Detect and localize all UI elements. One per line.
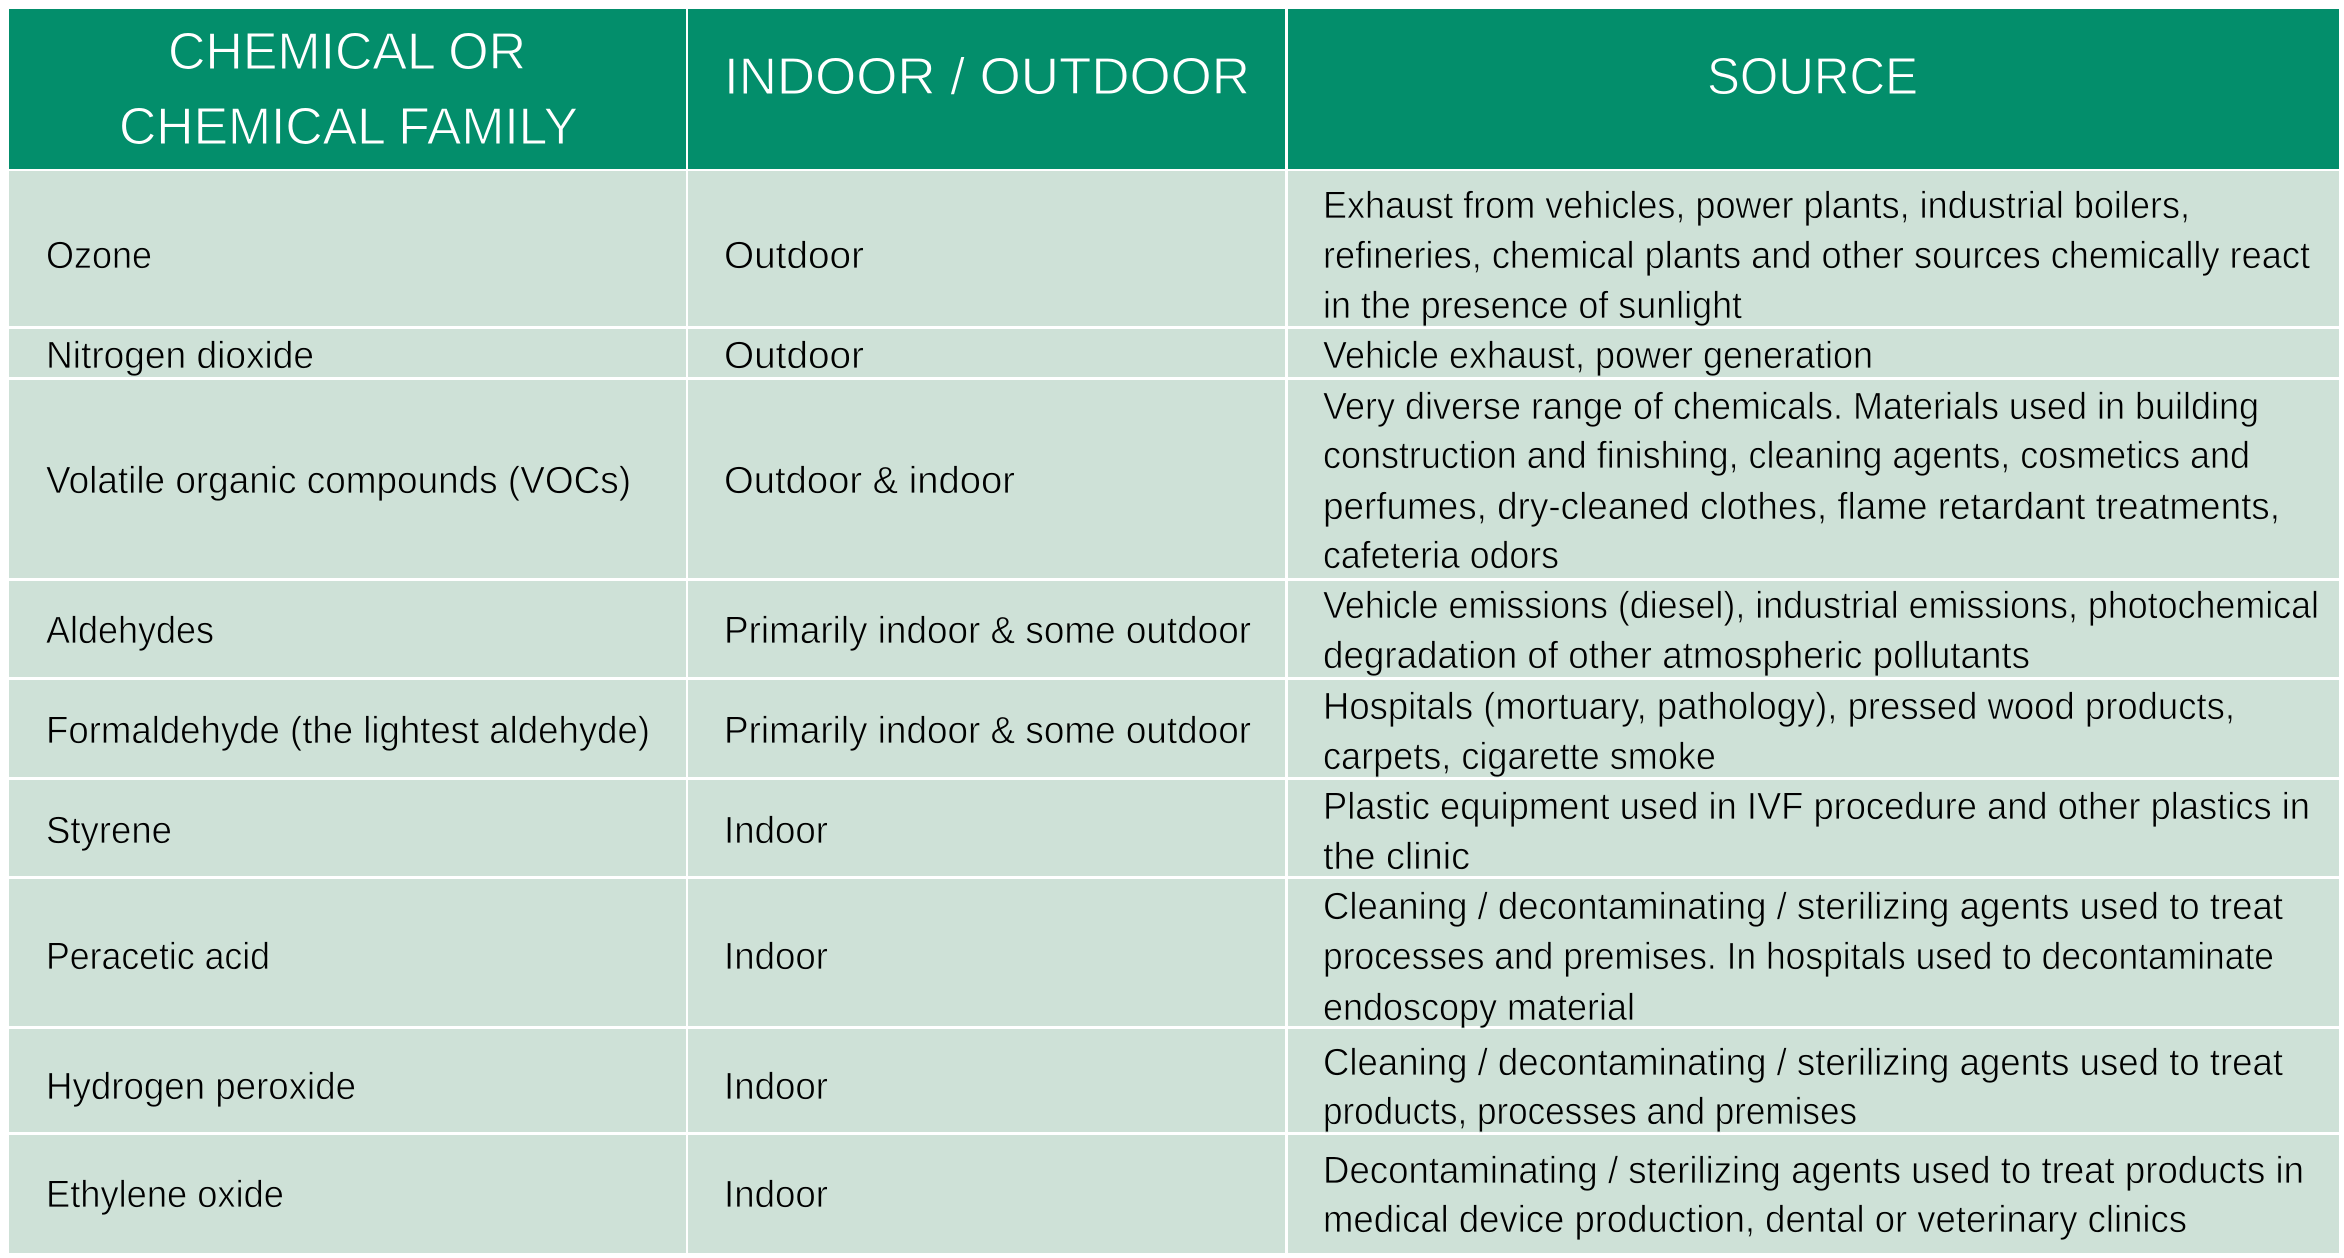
row: volatile organic compounds: Volatile organic compounds (VOCs)	[46, 460, 631, 502]
row: styrene: Indoor	[724, 810, 828, 852]
row: formaldehyde: carpets, cigarette smoke	[1323, 736, 1716, 778]
row: ethylene oxide: Indoor	[724, 1174, 828, 1216]
row: hydrogen peroxide: Cleaning / decontaminating / sterilizing agents used to treat	[1323, 1042, 2283, 1084]
row: volatile organic compounds	[9, 380, 2339, 578]
row: ozone: Outdoor	[724, 235, 864, 277]
row: ethylene oxide	[9, 1135, 2339, 1253]
row: aldehydes	[9, 581, 2339, 677]
row: aldehydes: Primarily indoor & some outdoor	[724, 610, 1251, 652]
row: aldehydes: Aldehydes	[46, 610, 214, 652]
row: peracetic acid: Cleaning / decontaminating / sterilizing agents used to treat	[1323, 886, 2283, 928]
row: nitrogen dioxide: Vehicle exhaust, power generation	[1323, 335, 1873, 377]
row: ethylene oxide: Ethylene oxide	[46, 1174, 284, 1216]
row: peracetic acid: Indoor	[724, 936, 828, 978]
row: styrene: Styrene	[46, 810, 172, 852]
row: volatile organic compounds: cafeteria odors	[1323, 535, 1559, 577]
row: styrene: the clinic	[1323, 836, 1470, 878]
row: formaldehyde: Formaldehyde (the lightest aldehyde)	[46, 710, 650, 752]
row: volatile organic compounds: construction and finishing, cleaning agents, cosmetics and	[1323, 435, 2250, 477]
row: volatile organic compounds: Very diverse range of chemicals. Materials used in building	[1323, 386, 2259, 428]
heading: chemical or chemical family: CHEMICAL OR	[168, 23, 526, 81]
header row	[9, 9, 2339, 169]
row: styrene	[9, 780, 2339, 878]
row: hydrogen peroxide: Hydrogen peroxide	[46, 1066, 356, 1108]
row: ozone: Exhaust from vehicles, power plants, industrial boilers,	[1323, 185, 2190, 227]
row: nitrogen dioxide: Outdoor	[724, 335, 864, 377]
row: formaldehyde: Primarily indoor & some outdoor	[724, 710, 1251, 752]
row: aldehydes: degradation of other atmospheric pollutants	[1323, 635, 2030, 677]
row: ethylene oxide: medical device production, dental or veterinary clinics	[1323, 1199, 2187, 1241]
row: hydrogen peroxide: products, processes and premises	[1323, 1091, 1857, 1133]
row: formaldehyde	[9, 680, 2339, 778]
row: peracetic acid	[9, 879, 2339, 1029]
row: ethylene oxide: Decontaminating / sterilizing agents used to treat products in	[1323, 1150, 2304, 1192]
row: peracetic acid: Peracetic acid	[46, 936, 270, 978]
row: hydrogen peroxide	[9, 1029, 2339, 1133]
heading: source: SOURCE	[1707, 48, 1918, 106]
row: ozone: refineries, chemical plants and other sources chemically react	[1323, 235, 2310, 277]
row: styrene: Plastic equipment used in IVF procedure and other plastics in	[1323, 786, 2310, 828]
row: hydrogen peroxide: Indoor	[724, 1066, 828, 1108]
row: ozone: in the presence of sunlight	[1323, 285, 1742, 327]
row: peracetic acid: processes and premises. In hospitals used to decontaminate	[1323, 936, 2274, 978]
row: volatile organic compounds: Outdoor & indoor	[724, 460, 1015, 502]
row: peracetic acid: endoscopy material	[1323, 987, 1635, 1029]
row: nitrogen dioxide	[9, 329, 2339, 377]
row: ozone: Ozone	[46, 235, 152, 277]
row: formaldehyde: Hospitals (mortuary, pathology), pressed wood products,	[1323, 686, 2235, 728]
row: ozone	[9, 171, 2339, 327]
heading: chemical or chemical family: CHEMICAL FAMILY	[119, 98, 578, 156]
row: nitrogen dioxide: Nitrogen dioxide	[46, 335, 314, 377]
heading: indoor / outdoor: INDOOR / OUTDOOR	[724, 48, 1250, 106]
row: volatile organic compounds: perfumes, dry-cleaned clothes, flame retardant treatments,	[1323, 486, 2280, 528]
heading: chemical or chemical family	[119, 23, 578, 156]
